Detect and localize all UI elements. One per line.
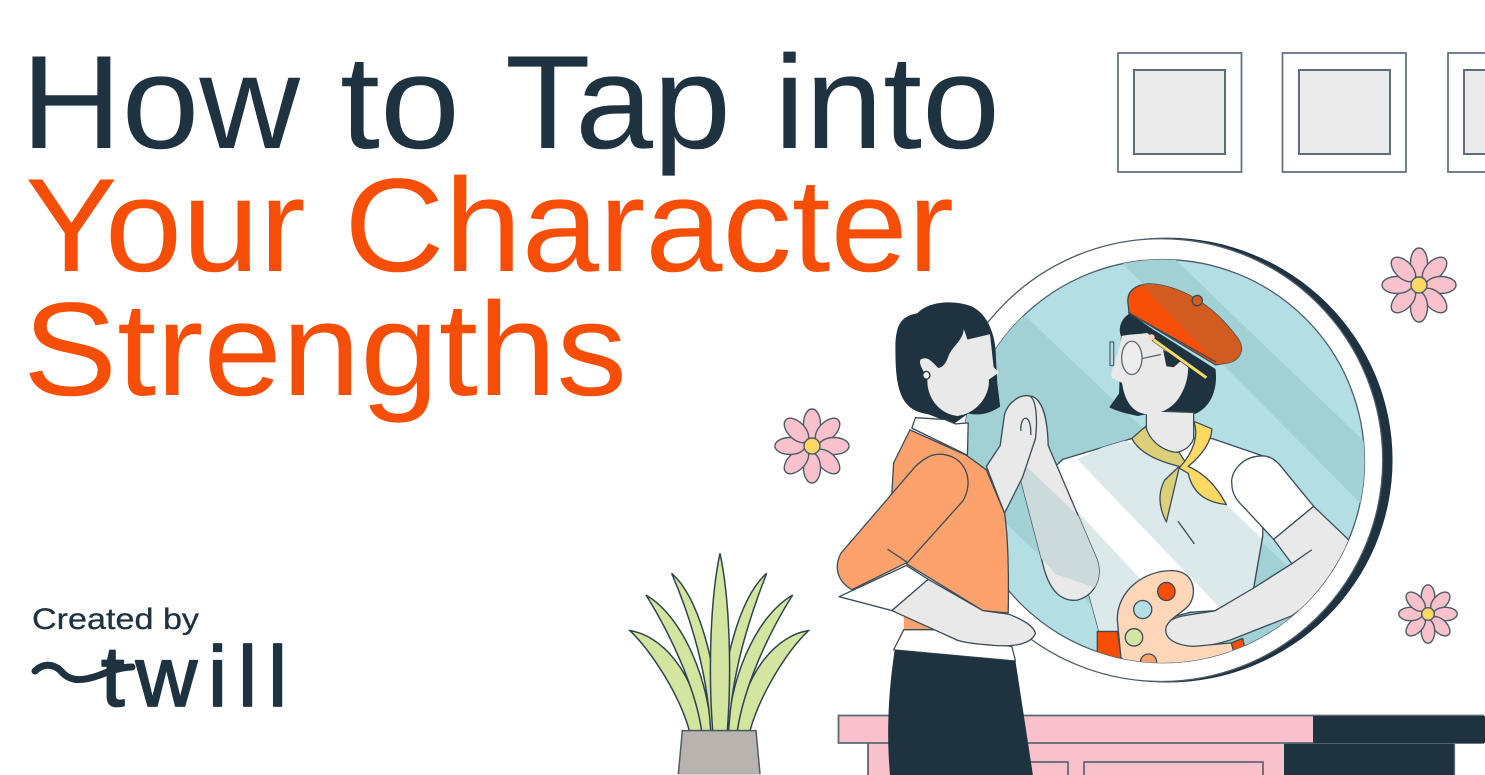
- vest: [892, 430, 1008, 613]
- hair: [895, 302, 1000, 424]
- palette: [1117, 571, 1234, 669]
- cuff red: [1231, 638, 1245, 651]
- title line 2: Your Character: [25, 152, 954, 300]
- dresser body right edge: [1454, 743, 1456, 775]
- arm band: [1021, 467, 1099, 588]
- pencil: [1148, 334, 1210, 380]
- frame 2: [1282, 53, 1406, 172]
- reflected bang: [1163, 350, 1182, 367]
- shirt fold: [1178, 521, 1194, 544]
- leaves: [630, 553, 808, 731]
- palette paint red: [1158, 582, 1175, 601]
- title line 1: [21, 29, 1000, 177]
- icon: flower right bottom: [1399, 585, 1457, 643]
- dresser top shadow: [1313, 716, 1485, 743]
- lower vest: [904, 612, 939, 630]
- reflected face: [1111, 333, 1188, 414]
- mirror frame: [940, 239, 1383, 681]
- sleeve: [837, 454, 968, 590]
- sleeve fold: [887, 549, 908, 563]
- dresser top: [838, 716, 1484, 743]
- title line 1: to: [340, 29, 460, 177]
- icon: flower right top: [1382, 248, 1456, 322]
- drawer left: [1000, 762, 1068, 775]
- beret knob: [1192, 295, 1202, 306]
- icon: flower left: [775, 409, 849, 483]
- forearm reflected: [1164, 506, 1354, 647]
- frame 3: [1448, 53, 1485, 172]
- collar: [912, 418, 968, 455]
- finger: [1021, 418, 1031, 435]
- beret band: [1128, 313, 1216, 362]
- glasses: [1110, 341, 1161, 375]
- frame 1: [1118, 53, 1242, 172]
- glass light bands: [965, 260, 1365, 663]
- pot: [678, 731, 760, 775]
- reflected hair back: [1109, 313, 1216, 416]
- skirt: [888, 650, 1033, 775]
- shirt: [1055, 439, 1263, 631]
- reflected raised arm: [1020, 396, 1100, 601]
- dresser body left edge: [867, 743, 869, 775]
- earring: [923, 371, 930, 379]
- title: [21, 29, 1000, 424]
- beret: [1128, 282, 1248, 369]
- face: [920, 329, 999, 416]
- shirt bands: [1077, 440, 1262, 632]
- scarf right: [1179, 421, 1226, 505]
- shirt side: [1254, 536, 1263, 588]
- title line 3: Strengths: [23, 276, 627, 424]
- potted plant: [630, 553, 808, 775]
- palette paint blue: [1134, 601, 1152, 619]
- reflected neck: [1146, 411, 1194, 453]
- raised hand: [986, 396, 1036, 513]
- beret shade: [1142, 284, 1242, 364]
- drawer right: [1084, 762, 1263, 775]
- dresser body: [868, 743, 1284, 775]
- pants reflected: [1096, 630, 1122, 658]
- person: [837, 302, 1036, 775]
- logo: twill: [35, 630, 287, 725]
- scarf: [1132, 421, 1226, 522]
- title line 1: Tap: [505, 29, 731, 177]
- title line 1: into: [774, 29, 1000, 177]
- mirror frame shadow: [942, 238, 1393, 683]
- shirt tail: [894, 630, 1015, 661]
- illustration: person and mirror: [837, 238, 1393, 775]
- forearm: [892, 579, 1035, 646]
- credit: created by: Created by: [32, 603, 199, 636]
- dresser: [838, 716, 1485, 775]
- logo wordmark: twill: [101, 630, 287, 725]
- logo swash: [35, 665, 132, 680]
- cuff: [839, 565, 928, 611]
- scarf left: [1132, 426, 1188, 522]
- dresser body shadow: [1284, 743, 1454, 775]
- palette paint green: [1125, 629, 1143, 646]
- mirror glass: [962, 260, 1365, 663]
- sleeve right: [1232, 456, 1314, 539]
- pot outline: [678, 731, 760, 774]
- title line 1: How: [21, 29, 301, 177]
- arm line: [1292, 550, 1312, 564]
- palette paint orange: [1140, 653, 1158, 663]
- reflection: [965, 260, 1365, 663]
- wall frames: [1118, 53, 1485, 172]
